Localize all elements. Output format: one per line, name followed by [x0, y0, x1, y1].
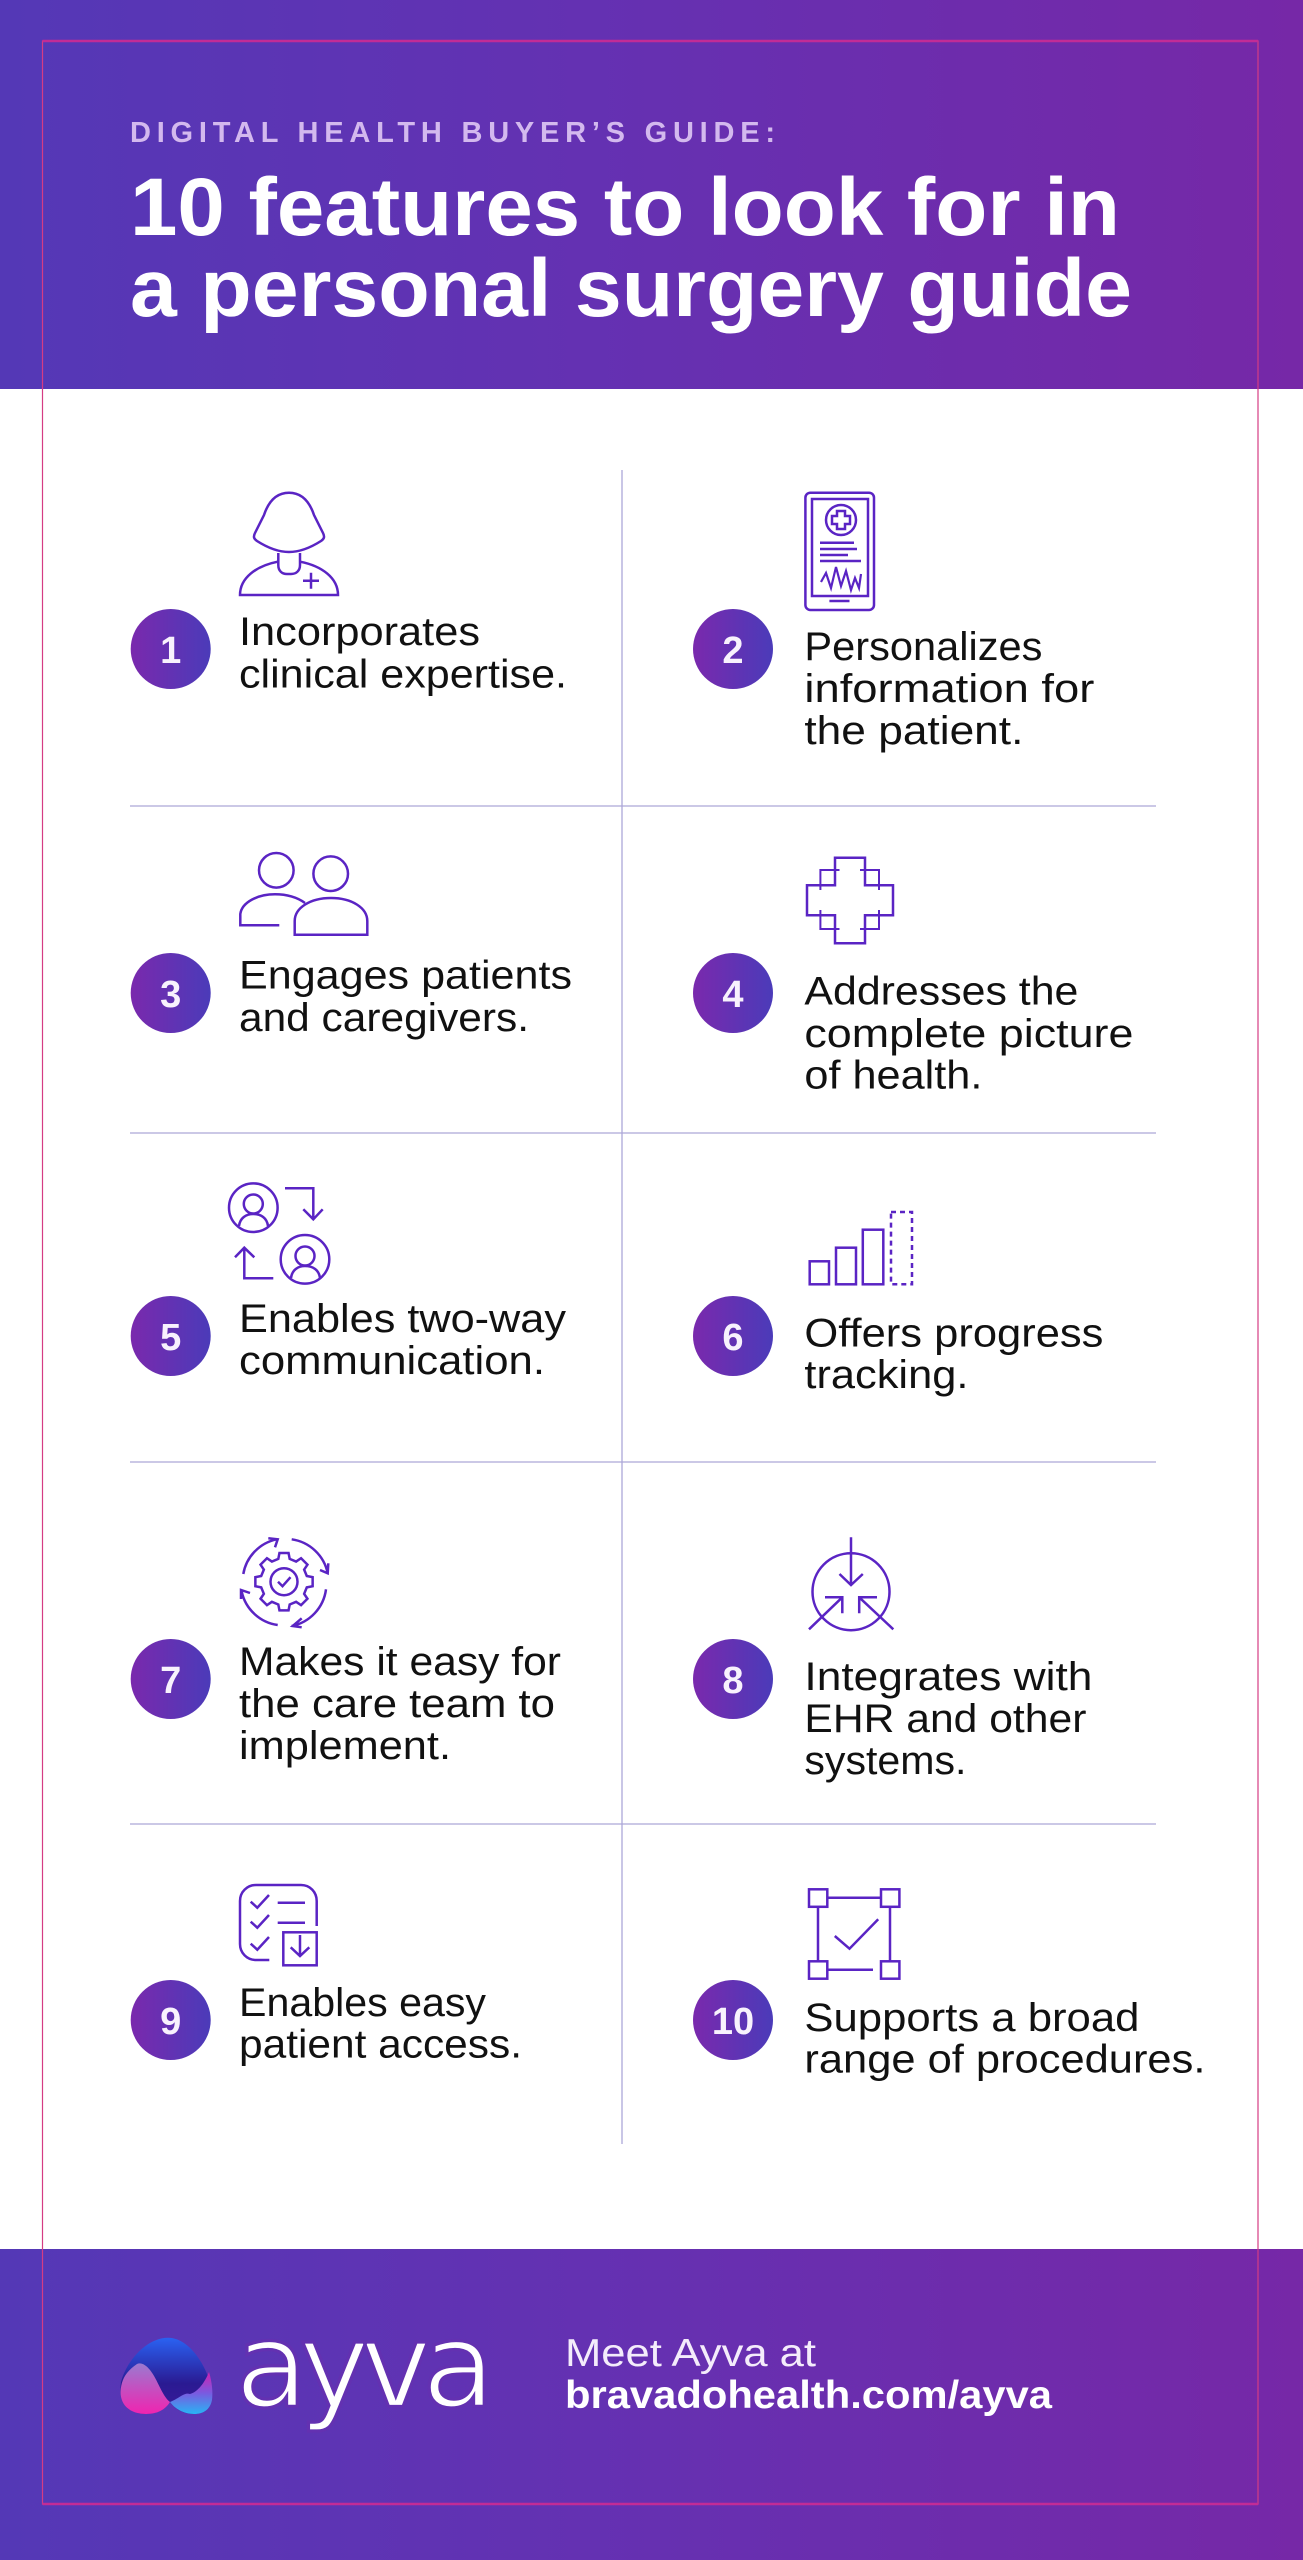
panel: feature 4: [693, 858, 1133, 1098]
text: feature 7: Makes it easy for: [239, 1640, 561, 1684]
text: feature 5: Enables two-way: [239, 1297, 566, 1341]
text: feature 7: [239, 1640, 561, 1768]
text: feature 6: [804, 1312, 1103, 1397]
panel: feature 3: [131, 853, 572, 1040]
number badge 8: [693, 1639, 773, 1719]
logo wordmark: ayva: [235, 2297, 486, 2435]
text: feature 8: systems.: [804, 1739, 966, 1783]
number badge 1: [131, 609, 211, 689]
header band: [0, 0, 1303, 389]
footer call to action: bravadohealth.com/ayva: [565, 2374, 1052, 2417]
text: feature 2: the patient.: [804, 709, 1023, 753]
number badge 2: 2: [722, 630, 744, 672]
number badge 2: [693, 609, 773, 689]
icon: nurse: [240, 493, 338, 595]
panel: feature 10: [693, 1889, 1205, 2082]
text: feature 6: Offers progress: [804, 1312, 1103, 1356]
number badge 1: 1: [160, 630, 181, 672]
text: feature 4: Addresses the: [804, 969, 1078, 1013]
text: feature 1: clinical expertise.: [239, 653, 567, 697]
text: feature 7: implement.: [239, 1724, 451, 1768]
number badge 9: 9: [160, 2001, 181, 2043]
footer call to action: Meet Ayva at: [565, 2332, 816, 2375]
text: feature 1: Incorporates: [239, 610, 480, 654]
text: feature 2: information for: [804, 667, 1094, 711]
text: feature 2: [804, 625, 1094, 753]
text: feature 4: [804, 969, 1133, 1098]
icon: layered cross: [807, 858, 893, 943]
text: feature 1: [239, 610, 567, 697]
number badge 10: [693, 1980, 773, 2060]
icon: gear with cycle arrows: [241, 1538, 328, 1627]
text: feature 10: Supports a broad: [804, 1996, 1139, 2040]
footer call to action: [565, 2332, 1052, 2417]
icon: selection box with check: [809, 1889, 899, 1979]
title: [130, 162, 1132, 334]
panel: feature 6: [693, 1212, 1103, 1397]
text: feature 9: Enables easy: [239, 1981, 486, 2025]
text: feature 9: patient access.: [239, 2023, 522, 2067]
panel: feature 8: [693, 1537, 1092, 1783]
footer band: [0, 2249, 1303, 2560]
text: feature 3: [239, 954, 572, 1040]
text: feature 2: Personalizes: [804, 625, 1042, 669]
number badge 4: 4: [722, 974, 744, 1016]
icon: converging arrows in circle: [809, 1537, 893, 1630]
number badge 6: [693, 1296, 773, 1376]
text: feature 3: Engages patients: [239, 954, 572, 998]
number badge 9: [131, 1980, 211, 2060]
number badge 3: 3: [160, 974, 181, 1016]
title: a personal surgery guide: [130, 243, 1132, 334]
number badge 8: 8: [722, 1660, 744, 1702]
text: feature 5: communication.: [239, 1339, 545, 1383]
text: feature 8: EHR and other: [804, 1697, 1086, 1741]
icon: two people: [240, 853, 367, 935]
text: feature 10: range of procedures.: [804, 2038, 1205, 2082]
text: feature 9: [239, 1981, 522, 2067]
number badge 10: 10: [712, 2001, 754, 2043]
panel: feature 9: [131, 1885, 522, 2067]
panel: feature 5: [131, 1183, 566, 1383]
number badge 5: 5: [160, 1317, 181, 1359]
text: feature 10: [804, 1996, 1205, 2082]
panel: feature 7: [131, 1538, 561, 1768]
text: feature 3: and caregivers.: [239, 996, 529, 1040]
title: 10 features to look for in: [130, 162, 1120, 253]
text: feature 5: [239, 1297, 566, 1383]
icon: two-way communication: [229, 1183, 329, 1284]
icon: progress bars: [810, 1212, 912, 1284]
panel: feature 2: [693, 493, 1094, 753]
text: feature 6: tracking.: [804, 1353, 968, 1397]
number badge 3: [131, 953, 211, 1033]
number badge 7: 7: [160, 1660, 181, 1702]
number badge 4: [693, 953, 773, 1033]
text: feature 8: Integrates with: [804, 1655, 1092, 1699]
icon: phone with medical record: [805, 493, 874, 610]
number badge 6: 6: [722, 1317, 744, 1359]
panel: feature 1: [131, 493, 567, 697]
text: feature 4: complete picture: [804, 1012, 1133, 1056]
icon: checklist with download: [240, 1885, 317, 1965]
text: feature 8: [804, 1655, 1092, 1783]
text: feature 7: the care team to: [239, 1682, 555, 1726]
eyebrow heading: DIGITAL HEALTH BUYER’S GUIDE:: [130, 117, 775, 149]
number badge 5: [131, 1296, 211, 1376]
logo mark: ayva drop: [120, 2338, 212, 2414]
number badge 7: [131, 1639, 211, 1719]
text: feature 4: of health.: [804, 1054, 982, 1098]
